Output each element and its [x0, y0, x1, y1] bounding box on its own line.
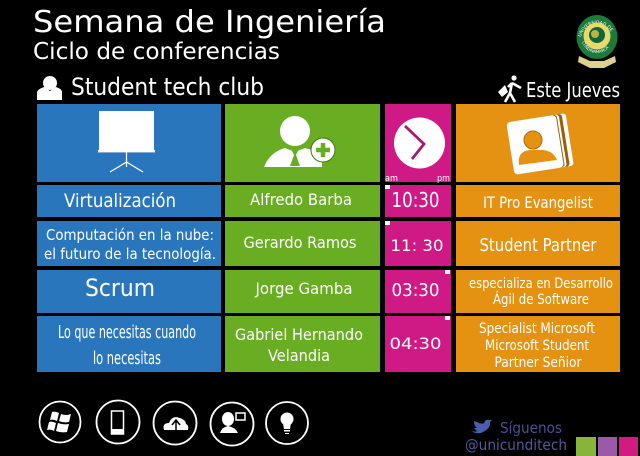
panel: schedule column [385, 104, 451, 372]
speaker: gerardo [225, 221, 380, 266]
icon row [40, 400, 308, 446]
header tile with clock [385, 104, 451, 184]
role: agile: Ágil de Software [493, 291, 589, 308]
role: microsoft: Microsoft Student [485, 338, 589, 354]
icon: cloud upload [154, 402, 196, 444]
topic: cloud computing [37, 221, 221, 266]
role: microsoft: Partner Señior [494, 355, 582, 371]
topic: virtualization [37, 185, 221, 217]
panel: speakers column [225, 104, 380, 372]
time: 04:30: 04:30 [390, 334, 442, 353]
icon: presenter with monitor [210, 402, 254, 446]
role: student partner: Student Partner [480, 235, 597, 256]
role: student partner [456, 221, 620, 266]
colour squares [576, 437, 638, 456]
speaker: alfredo: Alfredo Barba [250, 190, 352, 209]
am label: am [385, 174, 398, 184]
role: microsoft [456, 316, 620, 372]
panel: topics column [37, 104, 221, 372]
topic: cloud computing: Computación en la nube: [46, 226, 214, 244]
topic: scrum: Scrum [85, 274, 155, 302]
speaker: alfredo [225, 185, 380, 217]
icon: light bulb [266, 402, 308, 444]
topic: virtualization: Virtualización [64, 190, 176, 212]
header tile with contacts icon [456, 104, 620, 182]
role: agile: especializa en Desarrollo [469, 276, 613, 292]
time: 11:30 [385, 221, 451, 266]
time: 11:30: 11: 30 [390, 236, 444, 255]
role: agile [456, 270, 620, 313]
icon: contact cards [506, 113, 574, 175]
role: microsoft: Specialist Microsoft [479, 321, 595, 337]
speaker: jorge: Jorge Gamba [255, 279, 352, 298]
header tile with projector screen [37, 104, 221, 182]
topic: what you need: lo necesitas [93, 348, 161, 369]
emblem: university crest: UNIVERSIDAD DE [578, 20, 614, 36]
time: 04:30 [385, 316, 451, 372]
speaker: gerardo: Gerardo Ramos [244, 233, 356, 252]
este jueves label: Este Jueves [526, 78, 620, 102]
icon: projection screen [98, 111, 155, 172]
icon: walking person [498, 75, 521, 102]
topic: what you need: Lo que necesitas cuando [58, 322, 196, 343]
role: it pro [456, 185, 620, 217]
icon: twitter bird [471, 420, 492, 433]
topic: what you need [37, 316, 221, 372]
icon: clock [394, 118, 445, 168]
subtitle: Ciclo de conferencias [33, 39, 280, 65]
time: 10:30: 10:30 [392, 188, 440, 212]
pm label: pm [437, 174, 450, 184]
title: Semana de Ingeniería [33, 5, 386, 40]
time: 03:30 [385, 270, 451, 313]
emblem: university crest [576, 15, 618, 68]
time: 03:30: 03:30 [392, 280, 440, 301]
topic: scrum [37, 270, 221, 313]
speaker: gabriel [225, 316, 380, 372]
role: it pro: IT Pro Evangelist [483, 193, 593, 212]
twitter handle: @unicunditech [465, 436, 567, 454]
icon: student [37, 76, 62, 100]
speaker: gabriel: Gabriel Hernando [235, 325, 363, 344]
panel: roles column [456, 104, 620, 372]
icon: person with plus [264, 116, 335, 167]
speaker: jorge [225, 270, 380, 313]
icon: phone [96, 400, 140, 444]
club heading: Student tech club [71, 73, 264, 101]
header tile with speaker icon [225, 104, 380, 182]
speaker: gabriel: Velandia [268, 346, 330, 365]
time: 10:30 [385, 185, 451, 217]
topic: cloud computing: el futuro de la tecnología. [44, 245, 216, 263]
follow label: Síguenos [500, 419, 562, 437]
emblem: university crest: CUNDINAMARCA [582, 42, 609, 54]
icon: windows [40, 402, 80, 442]
